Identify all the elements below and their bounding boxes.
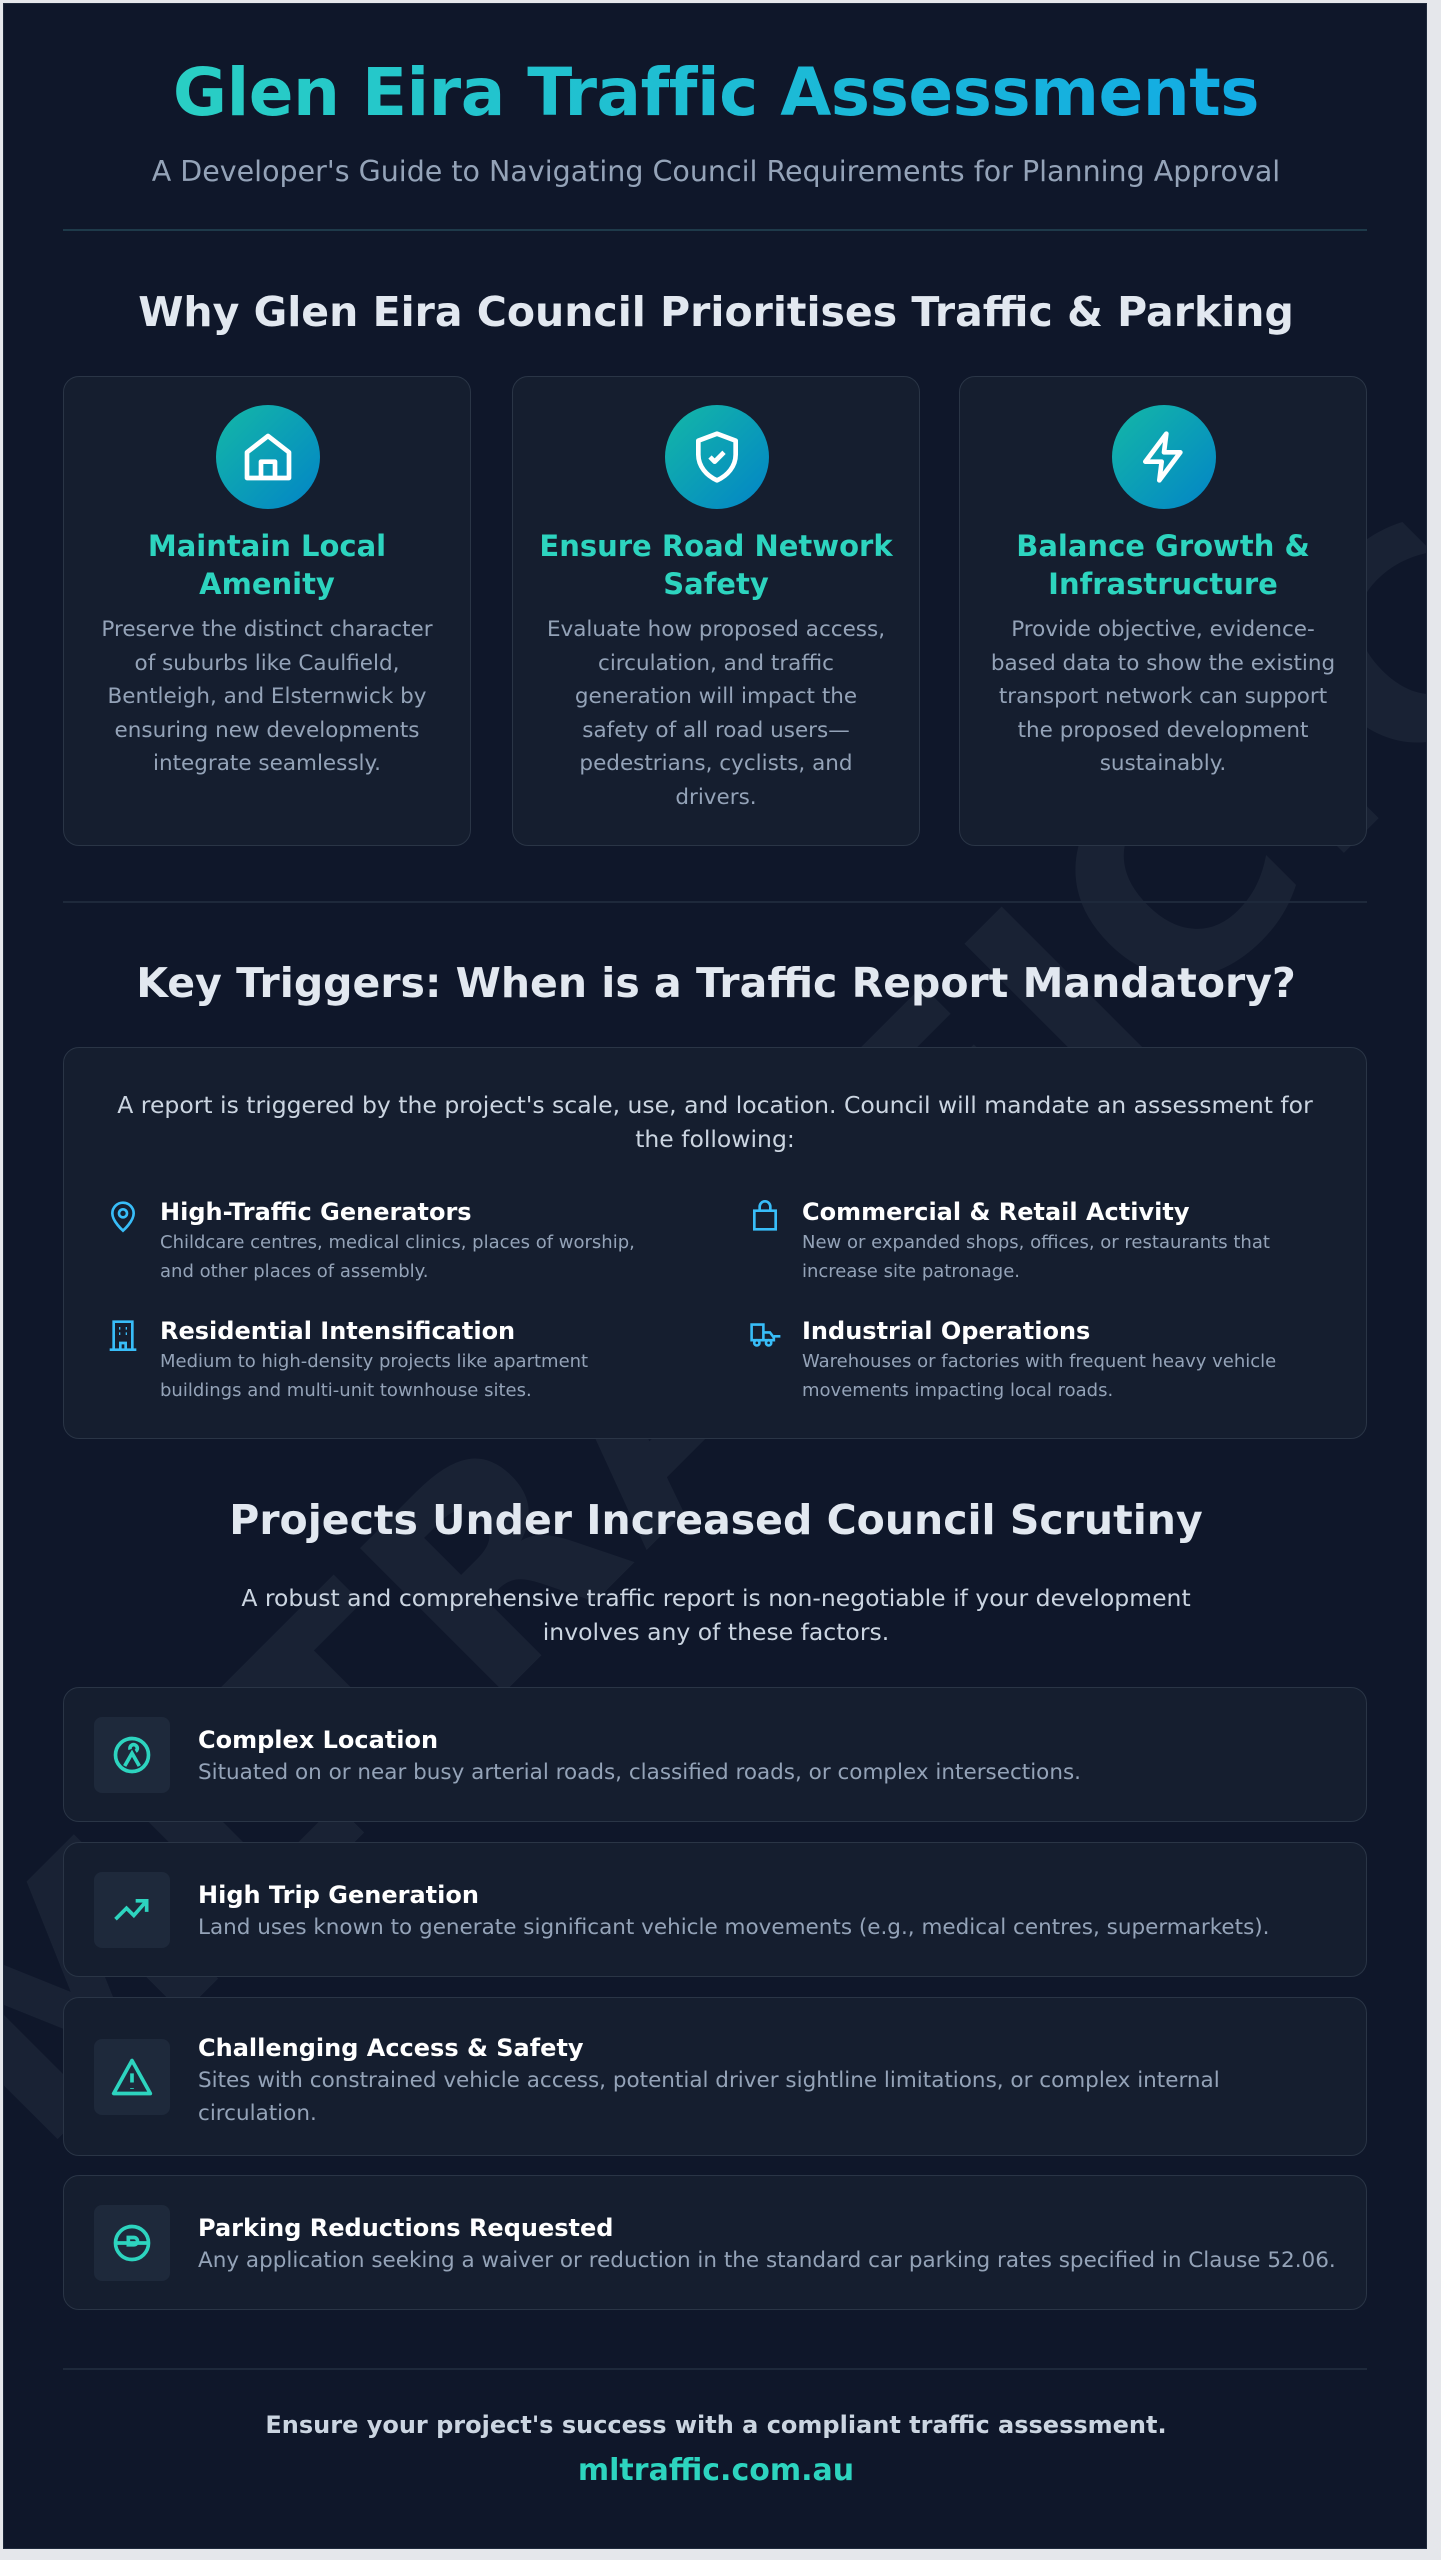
panel: triggers: Industrial Operations: [802, 1317, 1090, 1345]
card: high trip generation: Land uses known to generate significant vehicle movements (e.g., medical centres, supermarkets).: [198, 1915, 1270, 1940]
panel: triggers: Childcare centres, medical clinics, places of worship, and other places of assembly.: [160, 1232, 635, 1282]
item: industrial operations: [750, 1317, 1276, 1401]
item: commercial & retail: [753, 1198, 1270, 1282]
icon: location: [94, 1717, 170, 1793]
panel: road network safety: Safety: [663, 567, 769, 601]
title: Glen Eira Traffic Assessments: [173, 54, 1259, 131]
panel: balance growth: [959, 376, 1367, 846]
heading: why council prioritises: Why Glen Eira Council Prioritises Traffic & Parking: [138, 288, 1294, 336]
card: parking reductions: [63, 2175, 1367, 2310]
intro text: scrutiny: A robust and comprehensive traffic report is non-negotiable if your development involves any of these factors.: [241, 1584, 1191, 1646]
footer text: Ensure your project's success with a compliant traffic assessment.: [265, 2411, 1167, 2439]
card: high trip generation: High Trip Generation: [198, 1881, 479, 1909]
panel: road network safety: Evaluate how proposed access, circulation, and traffic generation will impact the safety of all road users—pedestrians, cyclists, and drivers.: [547, 617, 885, 810]
panel: triggers: Warehouses or factories with frequent heavy vehicle movements impacting local roads.: [802, 1351, 1276, 1401]
panel: maintain local amenity: [63, 376, 471, 846]
panel: triggers: High-Traffic Generators: [160, 1198, 472, 1226]
icon: house: [216, 405, 320, 509]
heading: key triggers: Key Triggers: When is a Traffic Report Mandatory?: [136, 959, 1296, 1007]
panel: triggers: Commercial & Retail Activity: [802, 1198, 1189, 1226]
subtitle: A Developer's Guide to Navigating Council Requirements for Planning Approval: [152, 155, 1280, 188]
card: challenging access: [63, 1997, 1367, 2156]
intro text: A report is triggered by the project's scale, use, and location. Council will mandate an assessment for the following:: [117, 1091, 1313, 1153]
card: complex location: Complex Location: [198, 1726, 438, 1754]
panel: road network safety: [512, 376, 920, 846]
card: parking reductions: Any application seeking a waiver or reduction in the standard car parking rates specified in Clause 52.06.: [198, 2248, 1336, 2273]
icon: lightning: [1112, 405, 1216, 509]
icon: trend up: [94, 1872, 170, 1948]
card: challenging access: Challenging Access & Safety: [198, 2034, 584, 2062]
panel: maintain local amenity: Preserve the distinct character of suburbs like Caulfield, Bentleigh, and Elsternwick by ensuring new developments integrate seamlessly.: [101, 617, 433, 776]
icon: parking: [94, 2205, 170, 2281]
item: high-traffic generators: [111, 1198, 635, 1282]
panel: balance growth: Balance Growth &: [1016, 529, 1310, 563]
panel: maintain local amenity: Maintain Local: [148, 529, 386, 563]
panel: maintain local amenity: Amenity: [199, 567, 335, 601]
panel: balance growth: Provide objective, evidence-based data to show the existing transport network can support the proposed development sustainably.: [991, 617, 1335, 776]
footer url: mltraffic.com.au: [578, 2453, 854, 2488]
card: complex location: [63, 1687, 1367, 1822]
panel: balance growth: Infrastructure: [1048, 567, 1278, 601]
panel: triggers: Residential Intensification: [160, 1317, 515, 1345]
panel: triggers: Medium to high-density projects like apartment buildings and multi-unit townhouse sites.: [160, 1351, 588, 1401]
heading: increased scrutiny: Projects Under Increased Council Scrutiny: [229, 1496, 1203, 1544]
card: parking reductions: Parking Reductions Requested: [198, 2214, 613, 2242]
card: high trip generation: [63, 1842, 1367, 1977]
icon: warning: [94, 2039, 170, 2115]
card: complex location: Situated on or near busy arterial roads, classified roads, or complex intersections.: [198, 1760, 1081, 1785]
panel: triggers: New or expanded shops, offices, or restaurants that increase site patronage.: [802, 1232, 1270, 1282]
item: residential intensification: [110, 1317, 588, 1401]
icon: shield: [665, 405, 769, 509]
panel: road network safety: Ensure Road Network: [539, 529, 893, 563]
card: challenging access: Sites with constrained vehicle access, potential driver sightline limitations, or complex internal circulation.: [198, 2068, 1220, 2126]
panel: triggers: [63, 1047, 1367, 1439]
